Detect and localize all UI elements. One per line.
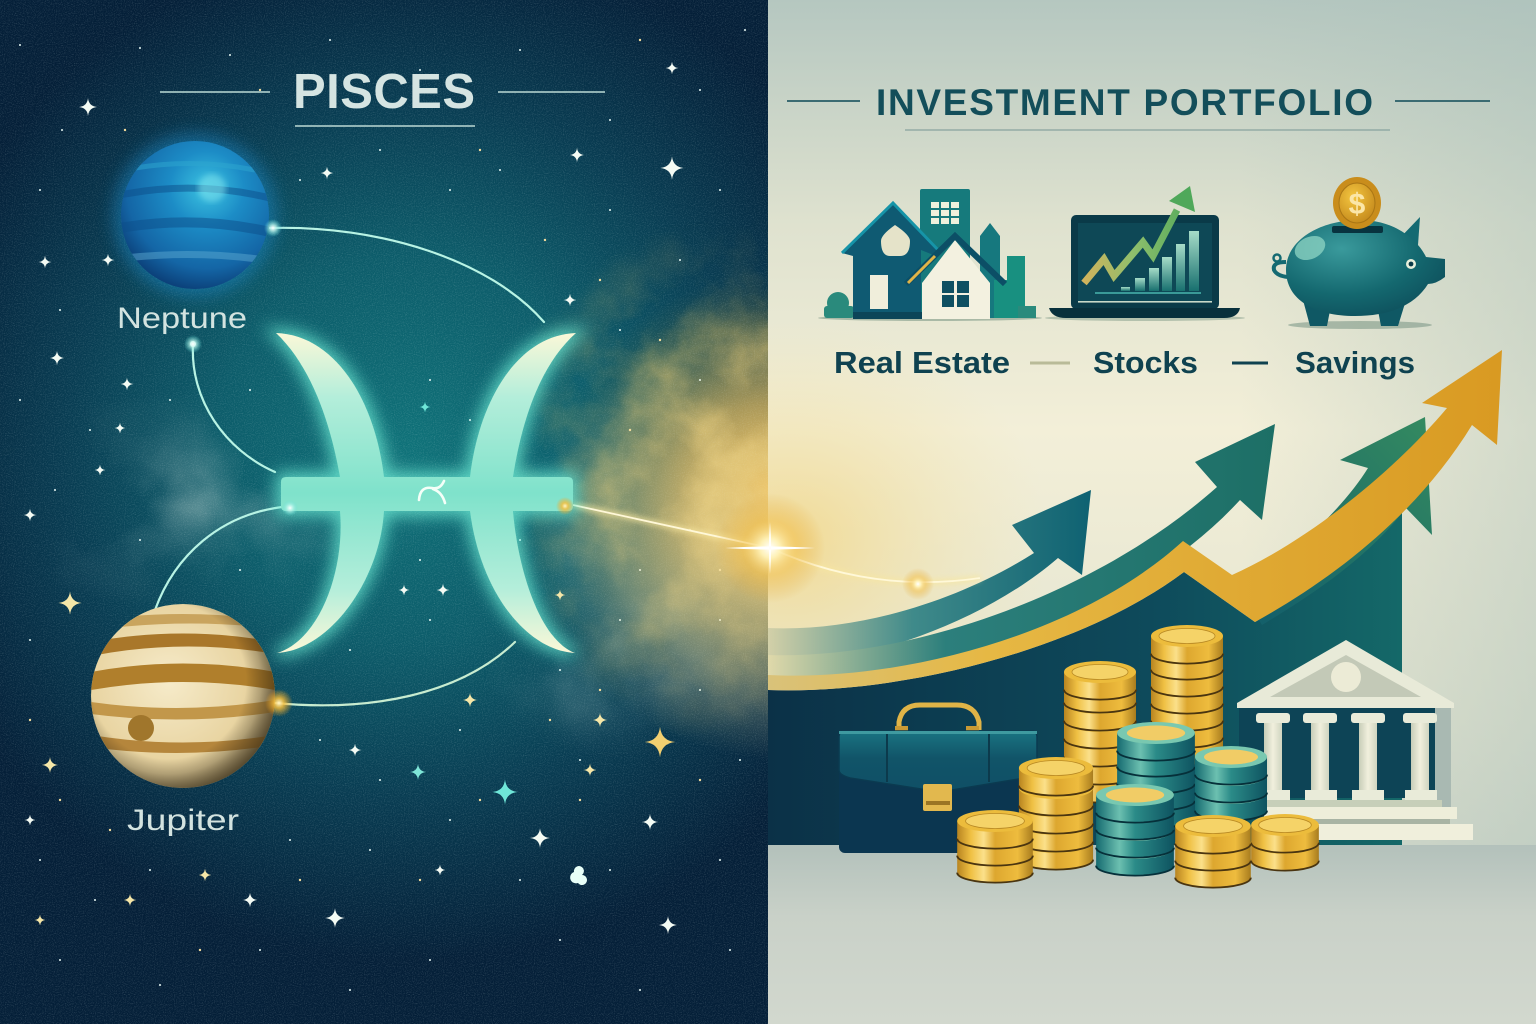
icon: Neptune planet <box>113 133 282 297</box>
panel: light right background <box>530 0 1536 1024</box>
dark teal backdrop below growth line <box>768 510 1402 845</box>
sparkle stars <box>24 62 684 934</box>
orbit lines <box>155 228 544 705</box>
icon: Pisces glyph <box>276 333 576 653</box>
icon: dollar coin: $ <box>1349 188 1366 221</box>
coin stack: gold front <box>1019 757 1093 870</box>
floor <box>768 845 1536 1024</box>
labels: portfolio categories: Stocks <box>1093 345 1198 380</box>
coin stack: teal right <box>1195 746 1267 821</box>
connector: glowing beam from Pisces to portfolio <box>573 493 980 603</box>
chart: green growth arrow <box>768 424 1275 682</box>
label: Neptune: Neptune <box>117 302 247 335</box>
title: Investment Portfolio: INVESTMENT PORTFOLIO <box>876 82 1373 123</box>
chart: second green arrow <box>1240 417 1432 625</box>
icon: piggy bank <box>1274 177 1445 329</box>
labels: portfolio categories <box>834 345 1415 380</box>
coin stack: gold right <box>1251 814 1319 871</box>
labels: portfolio categories: Real Estate <box>834 345 1010 380</box>
chart: gold growth arrow <box>768 350 1502 690</box>
coin stack: teal front <box>1096 784 1174 876</box>
coin stack: gold left <box>957 810 1033 883</box>
title: Pisces: PISCES <box>293 65 475 119</box>
icon: stocks laptop <box>1045 186 1245 321</box>
label: Jupiter: Jupiter <box>127 804 239 837</box>
chart: coin stacks <box>957 625 1319 888</box>
icon: briefcase <box>839 705 1037 853</box>
coin stack: mid gold <box>1064 661 1136 803</box>
coin stack: gold small <box>1175 815 1251 888</box>
labels: portfolio categories: Savings <box>1295 345 1415 380</box>
icon: dot at orbit start <box>184 335 202 353</box>
icon: dollar coin <box>1333 177 1381 229</box>
coin stack: teal tall <box>1117 722 1195 828</box>
icon: bank building <box>1237 640 1473 840</box>
icon: real estate <box>818 189 1042 321</box>
title: Pisces <box>160 65 605 126</box>
chart: teal growth arrow <box>768 490 1091 665</box>
coin stack: tall gold <box>1151 625 1223 766</box>
icon: Jupiter planet <box>91 604 293 788</box>
panel: cosmic left background <box>0 0 768 1024</box>
